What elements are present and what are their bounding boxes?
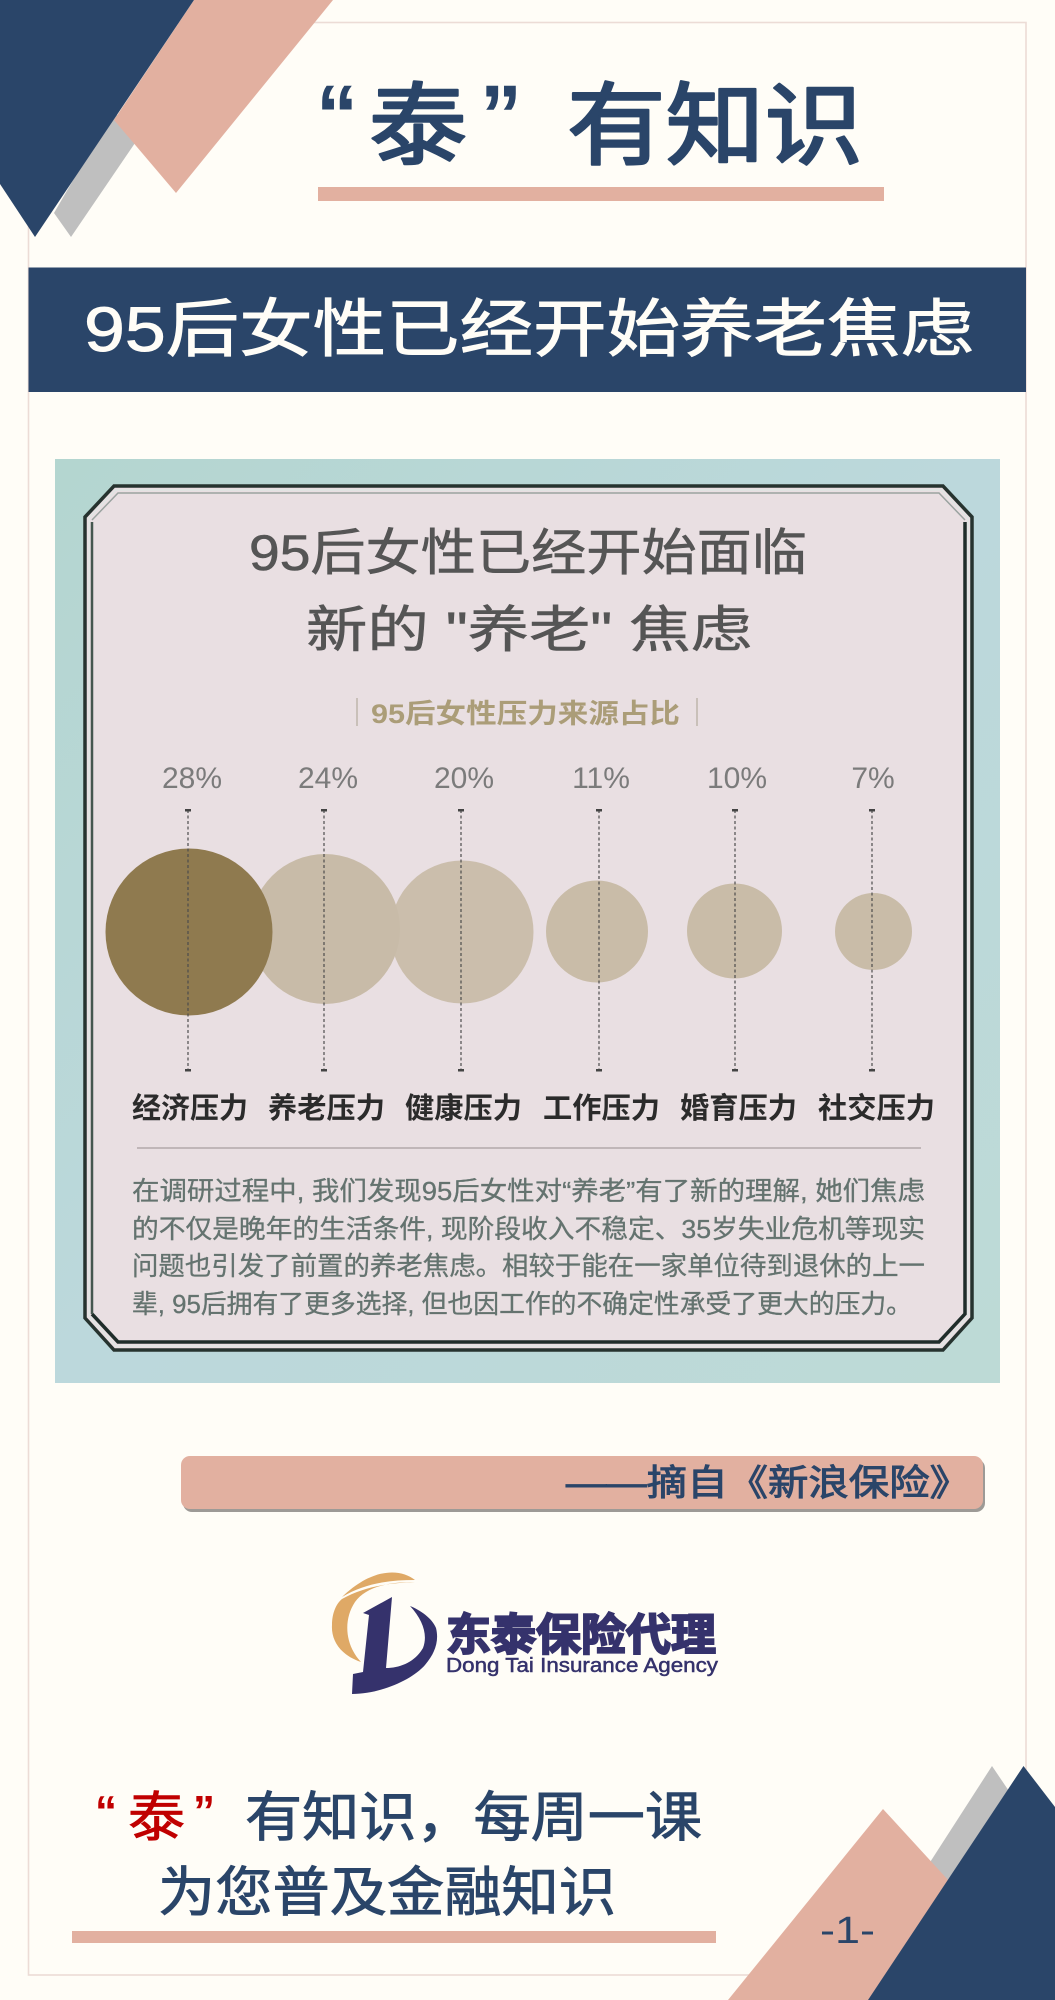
logo mark <box>332 1572 437 1694</box>
percentage labels: 7% <box>851 762 895 795</box>
panel frame <box>85 486 972 1350</box>
panel paragraph: 辈, 95后拥有了更多选择, 但也因工作的不确定性承受了更大的压力。 <box>132 1289 912 1319</box>
decoration: top-left triangles <box>0 0 333 237</box>
footer slogan: 有知识，每周一课 <box>245 1788 702 1848</box>
footer slogan: 为您普及金融知识 <box>158 1863 616 1923</box>
category labels: 养老压力 <box>268 1092 385 1125</box>
title: “泰”有知识 <box>316 68 863 177</box>
category labels: 健康压力 <box>405 1092 522 1125</box>
category labels: 经济压力 <box>132 1092 248 1125</box>
percentage labels: 20% <box>434 762 494 795</box>
footer slogan: “ <box>95 1787 117 1836</box>
panel paragraph <box>132 1176 925 1319</box>
panel heading: 新的 "养老" 焦虑 <box>306 602 752 658</box>
footer underline <box>72 1931 716 1943</box>
heading banner <box>28 268 1026 392</box>
percentage labels: 24% <box>298 762 358 795</box>
dashed leader lines <box>188 810 872 1070</box>
panel heading <box>249 525 807 658</box>
logo: Dong Tai Insurance Agency <box>332 1572 718 1694</box>
bubbles <box>106 848 912 1016</box>
bubble chart: pressure sources <box>106 762 935 1125</box>
page number: -1- <box>820 1910 875 1952</box>
panel heading: 95后女性已经开始面临 <box>249 525 807 581</box>
source pill <box>181 1456 985 1512</box>
category labels: 婚育压力 <box>680 1092 797 1125</box>
footer slogan: 泰 <box>128 1788 185 1848</box>
title: “泰”有知识: 有知识 <box>567 77 863 177</box>
title: “泰”有知识: ” <box>480 68 522 162</box>
percentage labels <box>162 762 895 795</box>
panel: survey infographic <box>55 459 1000 1383</box>
logo Chinese name: 东泰保险代理 <box>446 1611 716 1660</box>
title: “泰”有知识: 泰 <box>369 77 467 177</box>
category labels: 工作压力 <box>543 1092 660 1125</box>
banner heading text: 95后女性已经开始养老焦虑 <box>84 295 974 365</box>
title underline <box>318 187 884 201</box>
footer slogan <box>95 1787 702 1923</box>
percentage labels: 10% <box>707 762 767 795</box>
percentage labels: 28% <box>162 762 222 795</box>
panel paragraph: 问题也引发了前置的养老焦虑。相较于能在一家单位待到退休的上一 <box>132 1251 925 1281</box>
panel paragraph: 的不仅是晚年的生活条件, 现阶段收入不稳定、35岁失业危机等现实 <box>132 1214 925 1244</box>
chart subtitle: 95后女性压力来源占比 <box>371 699 680 729</box>
title: “泰”有知识: “ <box>316 68 358 162</box>
logo English name: Dong Tai Insurance Agency <box>446 1655 718 1677</box>
category labels <box>132 1092 935 1125</box>
decoration: bottom-right triangles <box>728 1766 1055 2000</box>
panel paragraph: 在调研过程中, 我们发现95后女性对“养老”有了新的理解, 她们焦虑 <box>132 1176 925 1206</box>
percentage labels: 11% <box>572 762 630 795</box>
source text: ——摘自《新浪保险》 <box>566 1462 970 1503</box>
category labels: 社交压力 <box>818 1092 935 1125</box>
footer slogan: ” <box>193 1787 215 1836</box>
